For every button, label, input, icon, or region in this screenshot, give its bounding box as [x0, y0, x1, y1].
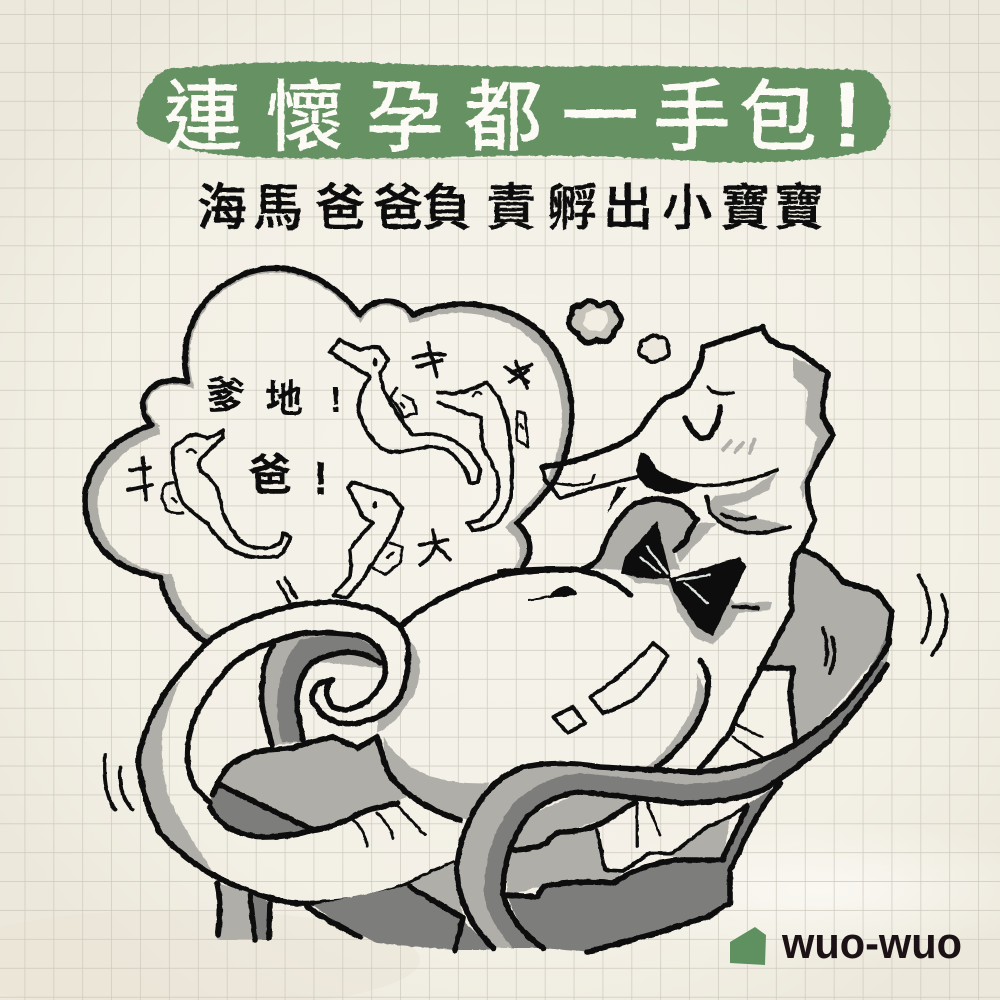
seahorse baby bottom: [278, 482, 403, 602]
spiral shade crescents: [140, 680, 217, 877]
blush: [723, 440, 754, 453]
motion lines: [104, 575, 947, 810]
green brush band: [136, 62, 890, 162]
title text: 連懷孕都一手包: [164, 73, 817, 161]
bow tie: [621, 521, 746, 636]
coil outlines: [138, 602, 460, 904]
belly shadow: [383, 737, 490, 820]
thought bubble: [85, 268, 572, 644]
bubble speech: daddy: [202, 372, 342, 504]
lower body panels: [307, 863, 493, 950]
small puff: [639, 335, 669, 362]
seahorse dad character: [138, 327, 892, 952]
bubble speech: daddy: !: [330, 379, 342, 420]
seahorse baby right: [438, 382, 528, 530]
head and snout: [542, 327, 833, 772]
seahorse baby left: [162, 430, 290, 557]
pelvic fin: [210, 737, 425, 847]
scribble marks: [128, 343, 532, 565]
icon: house: [730, 927, 766, 965]
bubble speech: daddy: !: [313, 452, 328, 504]
bubble speech: daddy: 地: [265, 379, 303, 421]
right dorsal fin: [733, 550, 892, 758]
mouth: [636, 452, 702, 494]
collar and bow tie: [500, 498, 772, 644]
tail coil band: [263, 633, 385, 745]
lower tail stubs: [217, 883, 272, 940]
bubble shading: [85, 268, 572, 644]
title banner: [136, 62, 890, 166]
smoke puffs: [569, 301, 669, 362]
closed eye: [708, 387, 733, 394]
brand name: wuo-wuo: [781, 919, 962, 968]
big tail band: [457, 640, 890, 948]
title text: !: [832, 64, 863, 166]
smile: [685, 407, 720, 438]
logo: [730, 919, 962, 968]
bubble speech: daddy: 爹: [202, 372, 247, 422]
subtitle: 海馬爸爸負責孵出小寶寶: [197, 180, 824, 236]
bubble outline: [85, 268, 572, 641]
bubble speech: daddy: 爸: [248, 451, 292, 500]
large puff: [569, 301, 621, 343]
belly line and marks: [400, 570, 708, 767]
seahorse baby top: [330, 340, 480, 483]
body interior panels: [507, 783, 780, 952]
